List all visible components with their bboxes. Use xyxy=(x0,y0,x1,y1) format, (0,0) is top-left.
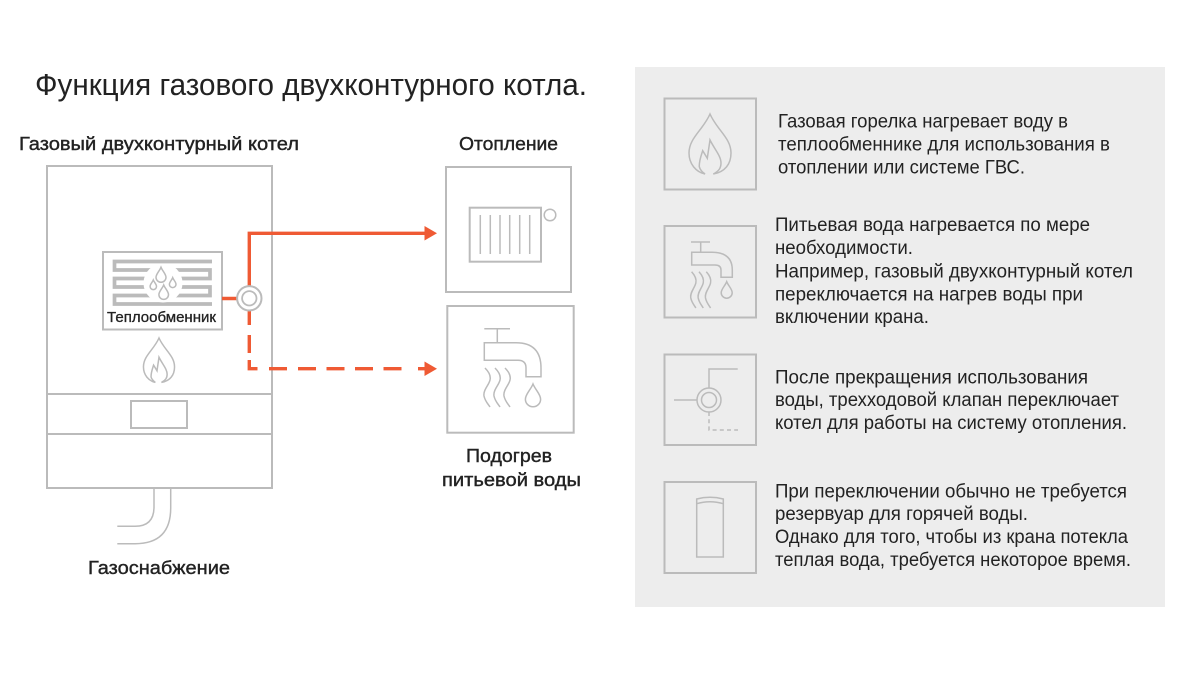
text: burner: Газовая горелка нагревает воду в xyxy=(778,112,1068,132)
label: gas supply: Газоснабжение xyxy=(88,557,230,578)
text: drinking water: Например, газовый двухконтурный котел xyxy=(775,262,1133,282)
icon: tap xyxy=(664,226,756,318)
panel: explanations xyxy=(635,67,1165,607)
text: drinking water xyxy=(775,215,1133,328)
text: valve switching: воды, трехходовой клапан переключает xyxy=(775,390,1119,411)
three-way valve xyxy=(237,286,262,310)
panel: heating radiator xyxy=(446,167,571,292)
icon: boiler flame xyxy=(143,338,175,382)
icon: three-way valve xyxy=(664,354,756,445)
text: valve switching: котел для работы на систему отопления. xyxy=(775,413,1127,434)
heading: boiler: Газовый двухконтурный котел xyxy=(19,133,299,154)
arrow: dashed flow to hot water xyxy=(249,311,437,376)
icon: storage tank xyxy=(664,482,756,573)
title: Функция газового двухконтурного котла. xyxy=(35,67,587,102)
text: valve switching: После прекращения использования xyxy=(775,368,1088,388)
text: drinking water: Питьевая вода нагревается по мере xyxy=(775,215,1090,236)
heat exchanger xyxy=(103,252,222,330)
label: hot water heating: питьевой воды xyxy=(442,469,581,490)
text: drinking water: необходимости. xyxy=(775,238,913,259)
text: valve switching xyxy=(775,368,1127,434)
heat exchanger: Теплообменник xyxy=(107,310,217,326)
text: no tank needed: резервуар для горячей воды. xyxy=(775,504,1028,525)
text: burner xyxy=(778,112,1110,178)
text: no tank needed: При переключении обычно не требуется xyxy=(775,482,1127,502)
arrow: solid flow to heating xyxy=(222,226,437,298)
panel: hot water tap xyxy=(447,306,574,433)
boiler body xyxy=(47,166,272,488)
gas supply pipe xyxy=(117,488,171,544)
text: drinking water: переключается на нагрев воды при xyxy=(775,284,1083,306)
text: no tank needed xyxy=(775,482,1131,571)
text: burner: теплообменнике для использования в xyxy=(778,134,1110,156)
icon: flame xyxy=(664,98,756,190)
text: no tank needed: Однако для того, чтобы из крана потекла xyxy=(775,527,1128,548)
label: hot water heating xyxy=(442,445,581,490)
text: drinking water: включении крана. xyxy=(775,307,929,328)
text: burner: отоплении или системе ГВС. xyxy=(778,158,1025,178)
text: no tank needed: теплая вода, требуется некоторое время. xyxy=(775,550,1131,571)
label: hot water heating: Подогрев xyxy=(466,445,552,466)
heading: heating: Отопление xyxy=(459,133,558,154)
